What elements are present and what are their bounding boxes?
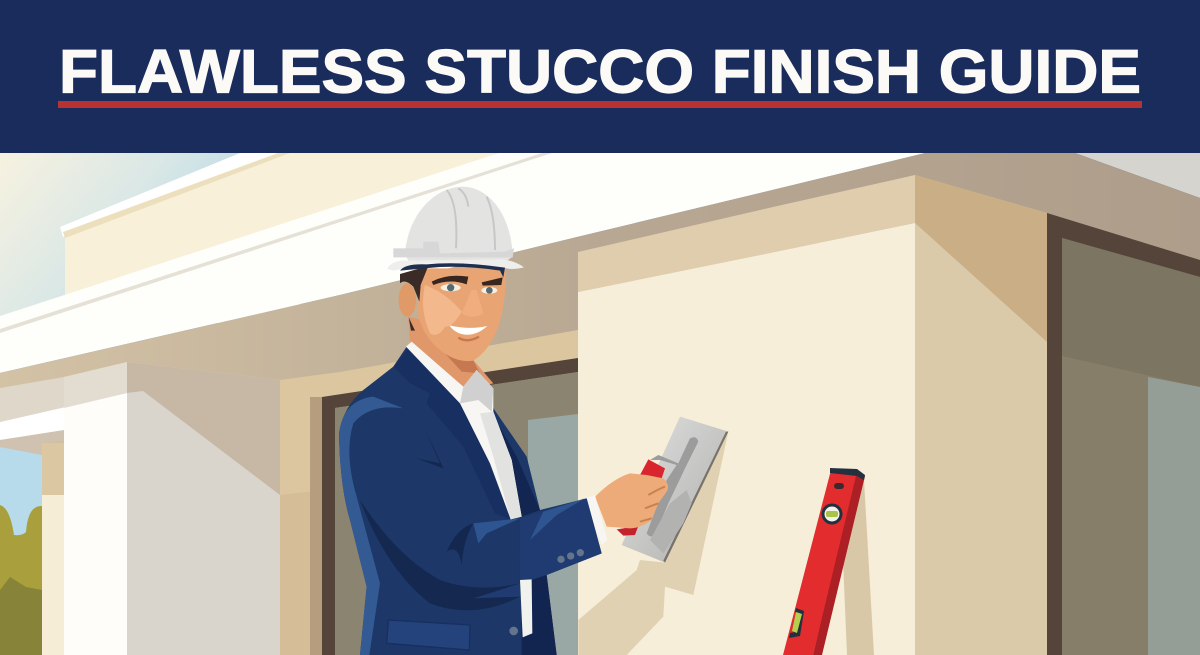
upper parapet <box>60 153 510 298</box>
eyes <box>441 284 497 294</box>
suit jacket <box>339 347 602 655</box>
jacket pocket <box>387 620 470 650</box>
soffit <box>0 153 1200 470</box>
hand <box>595 473 668 528</box>
column side <box>127 362 280 655</box>
small rear column <box>42 443 64 655</box>
left side: white beam <box>0 393 127 440</box>
level shadow <box>843 480 874 655</box>
worker illustration <box>339 187 728 655</box>
main wall band <box>578 175 915 292</box>
cheek highlight <box>423 285 462 335</box>
face <box>417 268 506 361</box>
white column <box>64 362 127 655</box>
header banner <box>0 0 1200 153</box>
tan wall by window <box>280 330 578 655</box>
background sky <box>0 445 42 655</box>
shirt cuff <box>585 495 607 545</box>
hard hat <box>387 187 524 277</box>
sky <box>0 153 300 323</box>
wall right return <box>915 175 1047 655</box>
icon: trowel <box>617 417 728 563</box>
title: FLAWLESS STUCCO FINISH GUIDE <box>59 38 1141 106</box>
building scene <box>0 153 1200 655</box>
window frame <box>322 358 578 655</box>
neck <box>408 317 493 392</box>
main stucco wall <box>578 223 915 655</box>
mouth <box>449 325 487 340</box>
right upper fascia <box>1075 153 1200 198</box>
trowel shadow on wall <box>578 432 728 655</box>
nose <box>462 290 483 317</box>
icon: red spirit level <box>783 468 865 655</box>
eyebrows <box>432 276 503 286</box>
beam soffit <box>0 430 64 455</box>
roof fascia <box>0 153 925 373</box>
title underline <box>58 101 1142 108</box>
right window <box>1047 213 1200 655</box>
background trees <box>0 505 42 655</box>
ear <box>399 283 416 317</box>
fascia ridge line <box>0 153 552 333</box>
sleeve buttons <box>509 549 584 635</box>
shirt and collar <box>406 342 532 637</box>
left side: strip under roof <box>0 362 127 422</box>
head <box>399 266 506 361</box>
hair <box>400 266 428 331</box>
